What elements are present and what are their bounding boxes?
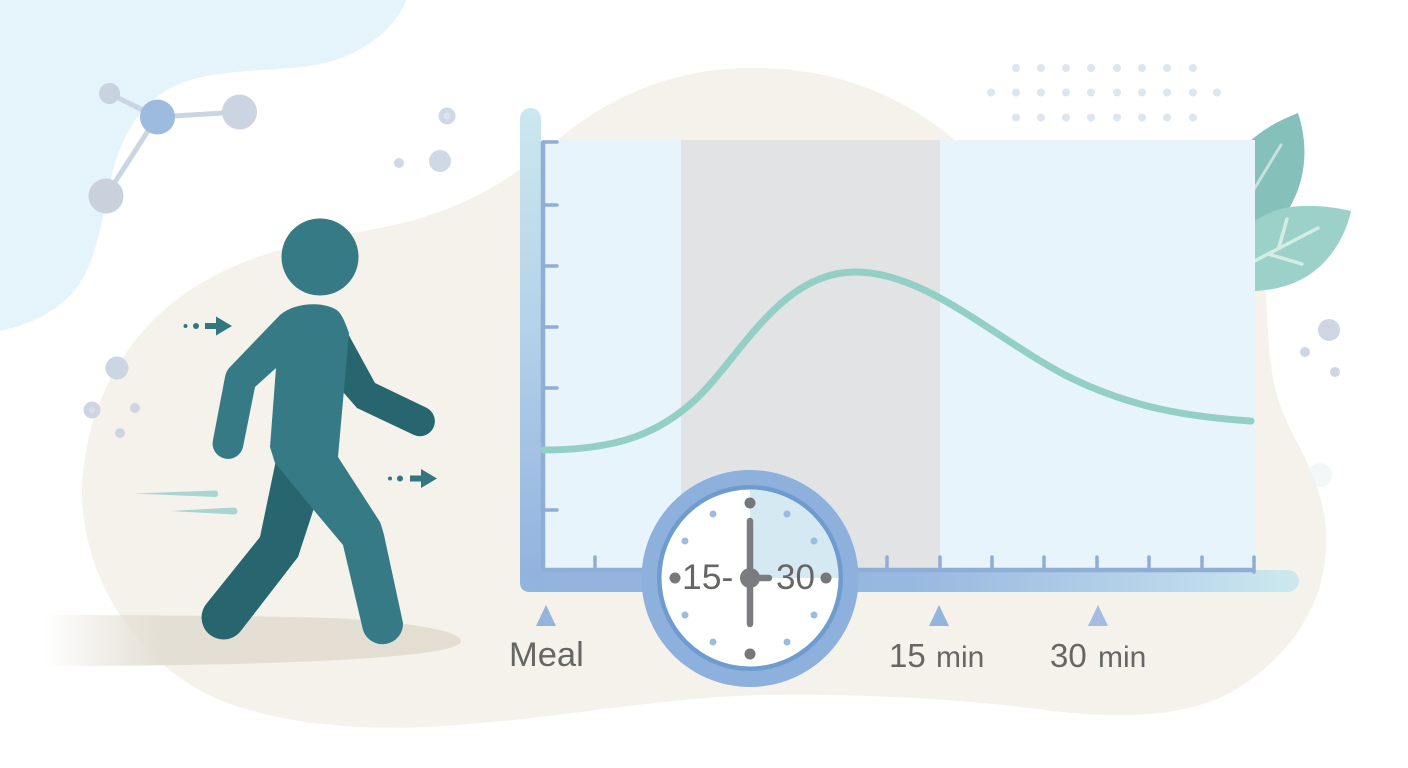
x axis xyxy=(520,570,1299,592)
label marker: meal: Meal xyxy=(509,636,584,674)
torso, front arm and front leg xyxy=(213,304,403,644)
label marker: 15 min: min xyxy=(936,641,984,674)
back leg xyxy=(202,460,314,639)
clock hands xyxy=(740,521,769,624)
label marker: 30 min: min xyxy=(1098,641,1146,674)
glucose curve xyxy=(543,272,1251,450)
label marker: 30 min xyxy=(1050,605,1146,674)
chart xyxy=(520,108,1299,592)
shaded 15 to 30 minute band xyxy=(681,140,940,572)
label marker: 15 min: 15 xyxy=(889,637,926,674)
clock xyxy=(642,470,858,687)
highlighted quarter xyxy=(750,490,838,578)
back arm xyxy=(343,330,435,436)
dot grid xyxy=(987,64,1221,122)
decorative dots: left of figure xyxy=(84,356,140,438)
molecule icon xyxy=(88,83,257,214)
clock text: 30 xyxy=(776,558,815,597)
label marker: 30 min: 30 xyxy=(1050,637,1087,674)
axis ticks xyxy=(543,142,1254,572)
decorative dots: top centre xyxy=(394,108,456,172)
background blob: light blue corner xyxy=(0,0,406,331)
speed lines xyxy=(134,490,238,514)
motion arrow: lower xyxy=(388,469,437,488)
motion arrow: upper xyxy=(184,316,232,336)
walking figure xyxy=(202,218,435,644)
background blob: beige xyxy=(82,68,1326,728)
y axis xyxy=(520,108,541,570)
decorative dots: right side xyxy=(1300,319,1340,487)
ground shadow xyxy=(45,615,461,666)
minute dots xyxy=(682,510,818,646)
hour dots xyxy=(670,498,832,660)
icon: leaves xyxy=(1240,113,1351,291)
head xyxy=(282,218,358,296)
clock text: 15- xyxy=(682,557,733,597)
chart plot background xyxy=(541,140,1255,572)
label marker: meal xyxy=(509,605,584,674)
label marker: 15 min xyxy=(889,605,984,674)
